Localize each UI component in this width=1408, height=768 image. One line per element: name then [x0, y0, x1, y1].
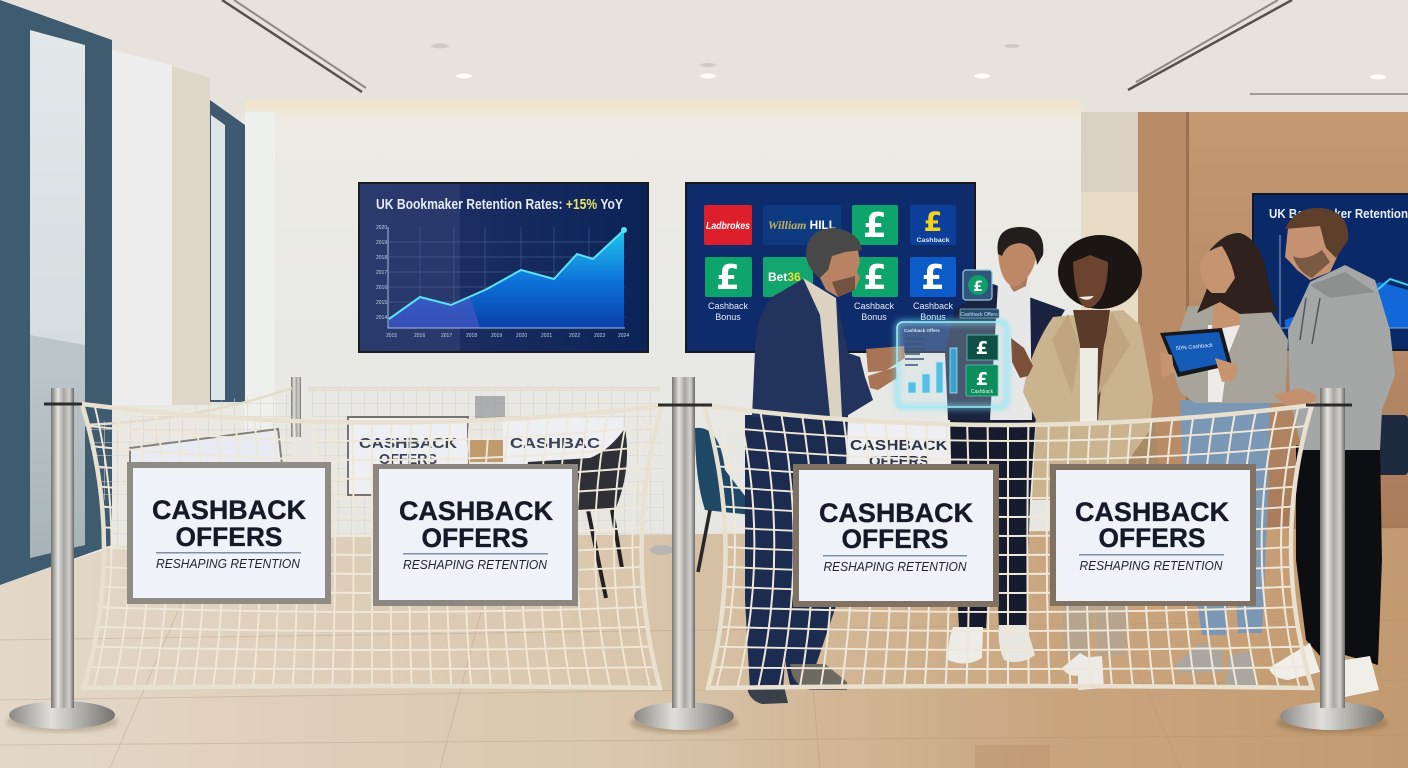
rear sign right: CASHBAC: [510, 435, 600, 452]
line chart: 2018: [466, 333, 477, 339]
chair: blue: [695, 428, 752, 572]
sign 4: CASHBACK: [1075, 497, 1229, 527]
post: centre: [630, 377, 738, 733]
line chart: 2024: [618, 333, 629, 339]
line chart: 2018: [376, 255, 387, 261]
sign 3: OFFERS: [842, 524, 948, 554]
tile: Ladbrokes: [704, 205, 752, 245]
rear sign centre: OFFERS: [379, 451, 437, 468]
rear sign centre: CASHBACK: [359, 435, 457, 452]
tile captions: Bonus: [920, 312, 946, 322]
line chart: 2020: [376, 225, 387, 231]
sign 4: OFFERS: [1098, 523, 1206, 553]
post: right: [1276, 388, 1388, 733]
line chart: [376, 225, 629, 339]
tile: Bet365: [763, 257, 813, 297]
left windows: [0, 0, 245, 585]
line chart: 2020: [516, 333, 527, 339]
line chart: 2019: [376, 240, 387, 246]
person: man in navy suit: [745, 228, 905, 704]
floor: [0, 528, 1408, 768]
post: rear base: [650, 545, 674, 555]
rear sign left: [130, 429, 282, 465]
tablet: [1160, 328, 1232, 377]
line chart: 2015: [376, 300, 387, 306]
line chart: 2016: [414, 333, 425, 339]
back wall: [245, 100, 1081, 545]
line chart: 2015: [386, 333, 397, 339]
sign 3: [793, 464, 999, 607]
tile captions: [708, 301, 954, 322]
sign 3: RESHAPING RETENTION: [824, 560, 967, 574]
hologram tile 2: £: [976, 369, 988, 390]
post: left: [6, 388, 118, 732]
tile: yellow pound cashback: £: [924, 207, 942, 238]
person: woman with tablet: [1160, 233, 1288, 688]
tile captions: Bonus: [861, 312, 887, 322]
line chart: 2021: [541, 333, 552, 339]
chair: right navy: [1372, 415, 1408, 530]
tile captions: Cashback: [708, 301, 749, 311]
tile: green pound 3: £: [863, 258, 887, 298]
tile: green pound 2: [705, 257, 752, 298]
hologram icon: £: [973, 279, 983, 295]
sign 2: [373, 464, 578, 606]
tile captions: Cashback: [854, 301, 895, 311]
sign 1: OFFERS: [176, 522, 282, 552]
chart title: UK Bookmaker Retention Rates: +15% YoY: [376, 197, 623, 213]
line chart: 2022: [569, 333, 580, 339]
ceiling: [0, 0, 1408, 154]
hologram tile 2: Cashback: [971, 389, 994, 395]
tile captions: Bonus: [715, 312, 741, 322]
person: man in white shirt: [945, 227, 1065, 664]
hologram bars: [908, 348, 957, 393]
tile: yellow pound cashback: Cashback: [916, 238, 950, 244]
hologram tile 1: £: [976, 338, 988, 359]
tile: yellow pound cashback: [910, 205, 956, 245]
sign 1: RESHAPING RETENTION: [156, 557, 301, 571]
tile: Bet365: Bet36: [768, 270, 801, 284]
sign 1: CASHBACK: [152, 495, 306, 525]
sign 2: OFFERS: [422, 523, 528, 553]
tile: green pound 2: £: [716, 258, 740, 298]
person: woman in trench coat: [1011, 235, 1160, 690]
sign 2: CASHBACK: [399, 496, 553, 526]
net: right panel: [692, 395, 1326, 695]
hologram text lines: Cashback Offers: [904, 328, 940, 333]
rear sign centre: [348, 417, 468, 495]
wall recess: [1081, 112, 1408, 532]
rear sign right: [503, 418, 623, 464]
screen: right side chart: [1252, 193, 1408, 351]
tile captions: Cashback: [913, 301, 954, 311]
sign 1: [127, 462, 331, 604]
hologram caption: Cashback Offers: [960, 312, 998, 318]
tile: blue pound: [910, 257, 956, 298]
tile: William Hill: [763, 205, 841, 245]
rear net and rear signs: [85, 377, 950, 600]
net: left panel: [70, 395, 675, 695]
line chart: 2014: [376, 315, 387, 321]
line chart: 2023: [594, 333, 605, 339]
line chart: 2019: [491, 333, 502, 339]
sign 4: RESHAPING RETENTION: [1080, 559, 1223, 573]
screen: bookmaker tiles: [685, 182, 976, 353]
sign 4: [1050, 464, 1256, 606]
hologram tile 2: [966, 365, 998, 396]
line chart: 2016: [376, 285, 387, 291]
rear sign behind people: CASHBACK: [850, 437, 948, 454]
tile: green pound 3: [852, 257, 898, 298]
hologram panel: [897, 270, 1007, 407]
sign 2: RESHAPING RETENTION: [403, 558, 548, 572]
tile: Ladbrokes: Ladbrokes: [706, 221, 750, 232]
tile: green pound: [852, 205, 898, 246]
person: man in grey hoodie: [1269, 208, 1395, 697]
screen: retention chart: [358, 182, 649, 353]
line chart: 2017: [441, 333, 452, 339]
sign 3: CASHBACK: [819, 498, 973, 528]
rear sign behind people: [848, 424, 950, 470]
chair: dark: [527, 428, 627, 598]
line chart: 2017: [376, 270, 387, 276]
tile: green pound: £: [863, 206, 887, 246]
rear sign behind people: OFFERS: [869, 453, 929, 470]
tile: blue pound: £: [921, 258, 945, 298]
tile: William Hill: William HILL: [768, 218, 836, 232]
tablet: 50% Cashback: [1176, 343, 1213, 352]
